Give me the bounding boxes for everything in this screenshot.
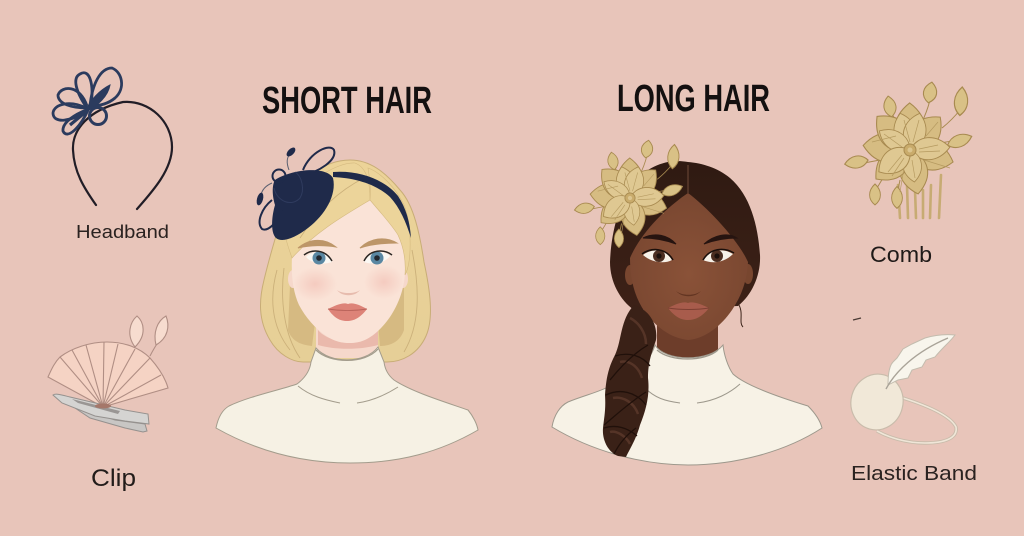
eyes xyxy=(306,252,390,264)
side-swept fringe xyxy=(285,163,370,258)
gold flower hairpiece xyxy=(574,139,684,248)
ears xyxy=(625,265,635,285)
icon: stray mark xyxy=(853,318,861,320)
navy fascinator xyxy=(255,146,334,240)
icon: elastic band with covered button and feather xyxy=(845,335,956,443)
blush xyxy=(293,267,337,301)
brows xyxy=(643,235,737,244)
label: Comb: Comb xyxy=(870,242,932,267)
icon: gold flower comb xyxy=(844,81,974,218)
nose xyxy=(676,291,701,296)
nose xyxy=(337,290,360,295)
neck xyxy=(316,318,378,358)
ears xyxy=(288,270,298,288)
sweater xyxy=(216,347,478,463)
eyes xyxy=(643,250,733,262)
hair inner shadow xyxy=(288,285,404,346)
brows xyxy=(298,239,397,248)
figure: woman with short hair xyxy=(216,146,478,463)
label: Headband: Headband xyxy=(76,222,169,242)
face xyxy=(292,198,405,343)
braid xyxy=(603,305,656,457)
label: Clip: Clip xyxy=(91,465,136,492)
stray hair strand xyxy=(737,302,743,327)
neck xyxy=(657,312,718,360)
lips xyxy=(668,302,709,320)
figure: woman with long hair and braid xyxy=(552,139,822,465)
face xyxy=(630,193,748,340)
hair part xyxy=(687,165,689,193)
comb teeth xyxy=(898,175,941,218)
icon: fan clip with leaves xyxy=(48,316,168,432)
long hair: back xyxy=(610,161,760,310)
sweater xyxy=(552,345,822,465)
label: Elastic Band: Elastic Band xyxy=(851,462,977,485)
title: short hair: SHORT HAIR xyxy=(262,80,432,122)
navy hairband xyxy=(333,172,411,238)
title: long hair: LONG HAIR xyxy=(617,78,770,120)
icon: headband with navy loops xyxy=(53,68,172,209)
short hair: back of bob xyxy=(260,160,430,362)
hair strands xyxy=(273,178,417,358)
lips xyxy=(328,303,367,321)
